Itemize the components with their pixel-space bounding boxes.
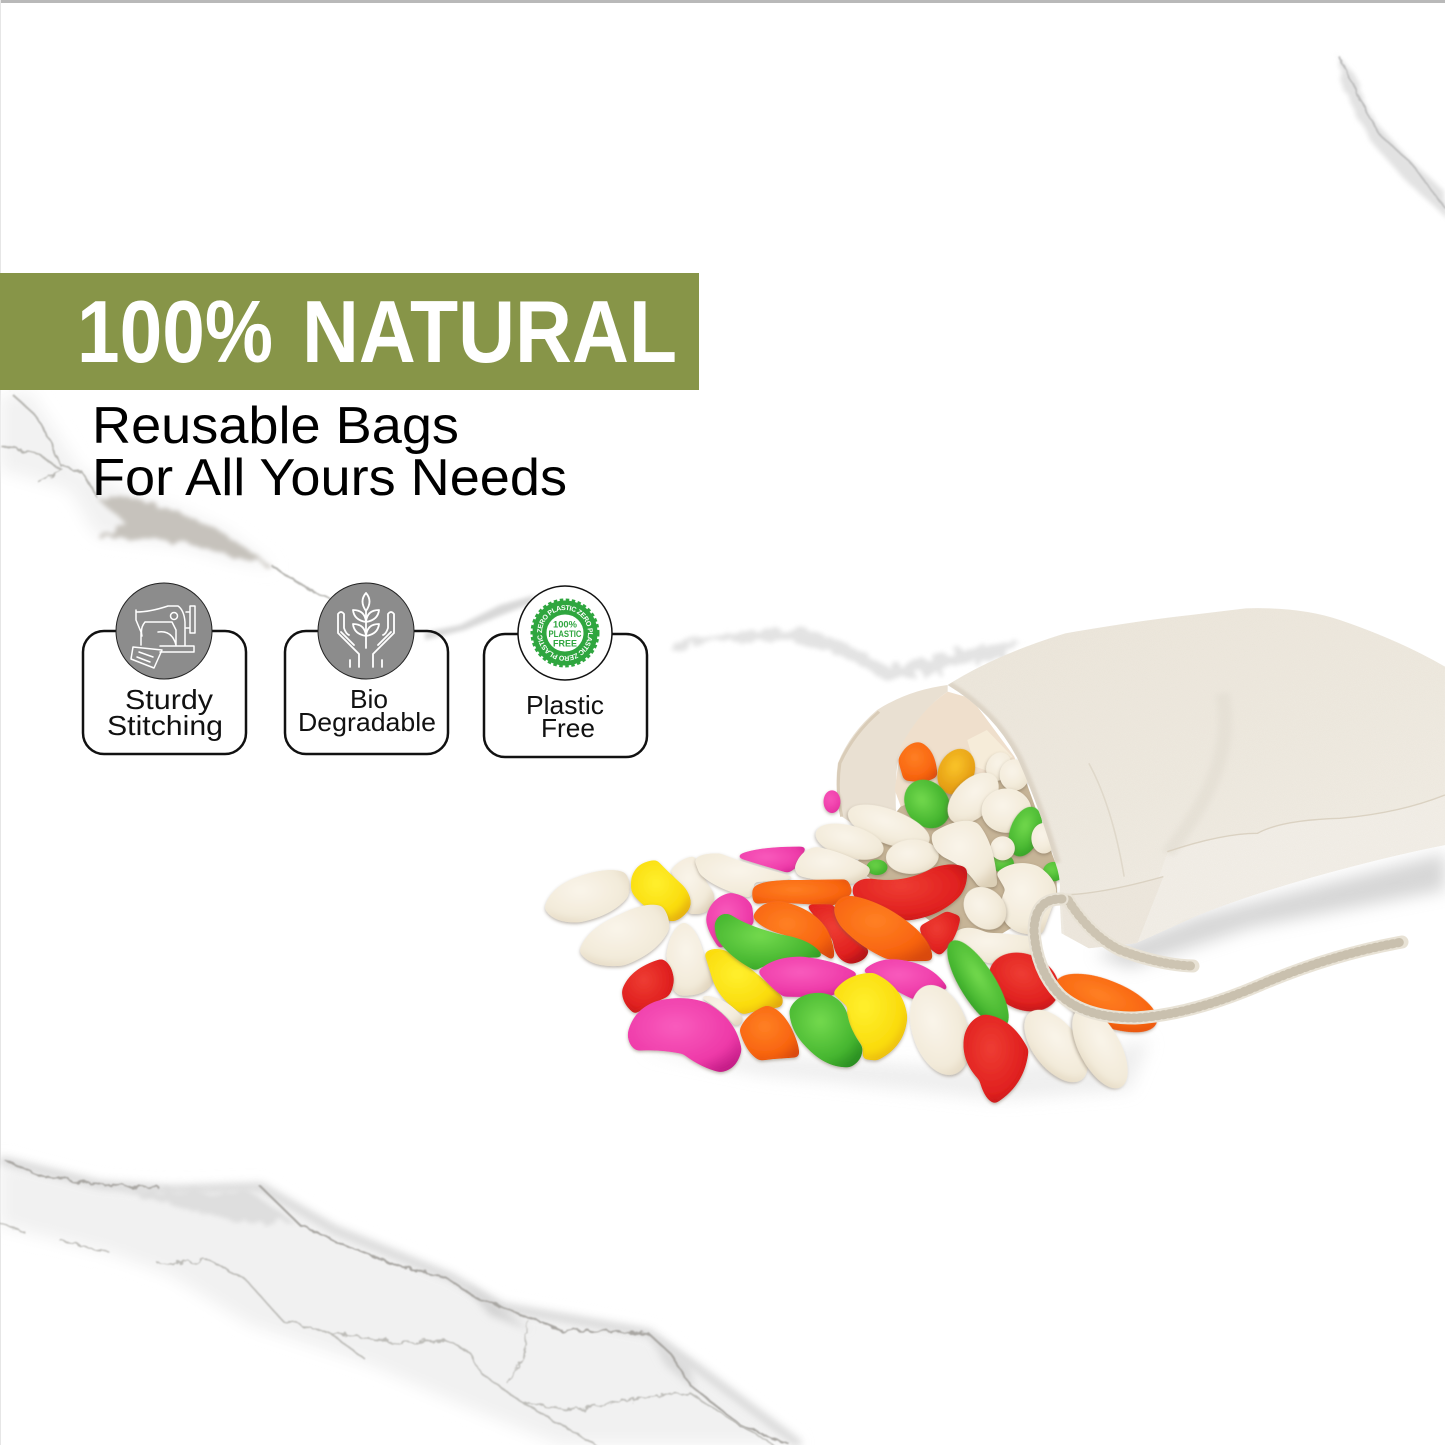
marble vein: bottom left: [0, 1160, 800, 1445]
subtitle: For All Yours Needs: [92, 449, 567, 507]
bag opening and inner candy: [810, 685, 1064, 963]
gaps between candies: [854, 760, 1057, 933]
gauze lining: [895, 692, 1026, 833]
ground shadows: [640, 853, 1445, 1100]
candy: right side: [900, 933, 1164, 1103]
icon: zero plastic badge: ZERO PLASTIC ZERO PLASTIC ZERO PLASTIC: [537, 605, 593, 661]
subtitle: [92, 397, 567, 507]
bag inner rim: [837, 685, 948, 827]
card label: [107, 684, 223, 741]
marble vein: top right: [1337, 55, 1445, 216]
banner: [0, 273, 699, 390]
card label: Sturdy: [125, 684, 213, 715]
card label: [526, 690, 604, 743]
banner title: NATURAL: [302, 282, 677, 381]
icon: zero plastic badge: FREE: [553, 638, 577, 650]
banner title: 100%: [77, 282, 273, 381]
icon: zero plastic badge: PLASTIC: [548, 629, 582, 640]
feature card: bio degradable: [285, 583, 448, 754]
candy: front pile: [545, 847, 967, 1072]
card label: Plastic: [526, 690, 604, 720]
icon: sewing machine: [116, 583, 212, 679]
card label: Free: [541, 713, 595, 743]
icon: hands holding wheat: [318, 583, 414, 679]
feature card: sturdy stitching: [83, 583, 246, 754]
drawstring cord: [1034, 899, 1402, 1018]
marble vein: centre: [425, 595, 1020, 680]
card label: Bio: [350, 684, 388, 714]
card label: Degradable: [298, 707, 436, 737]
icon: zero plastic badge: 100%: [553, 620, 578, 630]
card label: Stitching: [107, 710, 223, 741]
product photo: cotton bag with spilled candy: [545, 608, 1445, 1103]
feature card: plastic free: [482, 585, 648, 758]
bag body: [948, 608, 1445, 950]
subtitle: Reusable Bags: [92, 397, 459, 455]
card label: [298, 684, 436, 737]
icon: zero plastic badge: [517, 585, 613, 681]
marble vein: middle left: [0, 392, 338, 602]
